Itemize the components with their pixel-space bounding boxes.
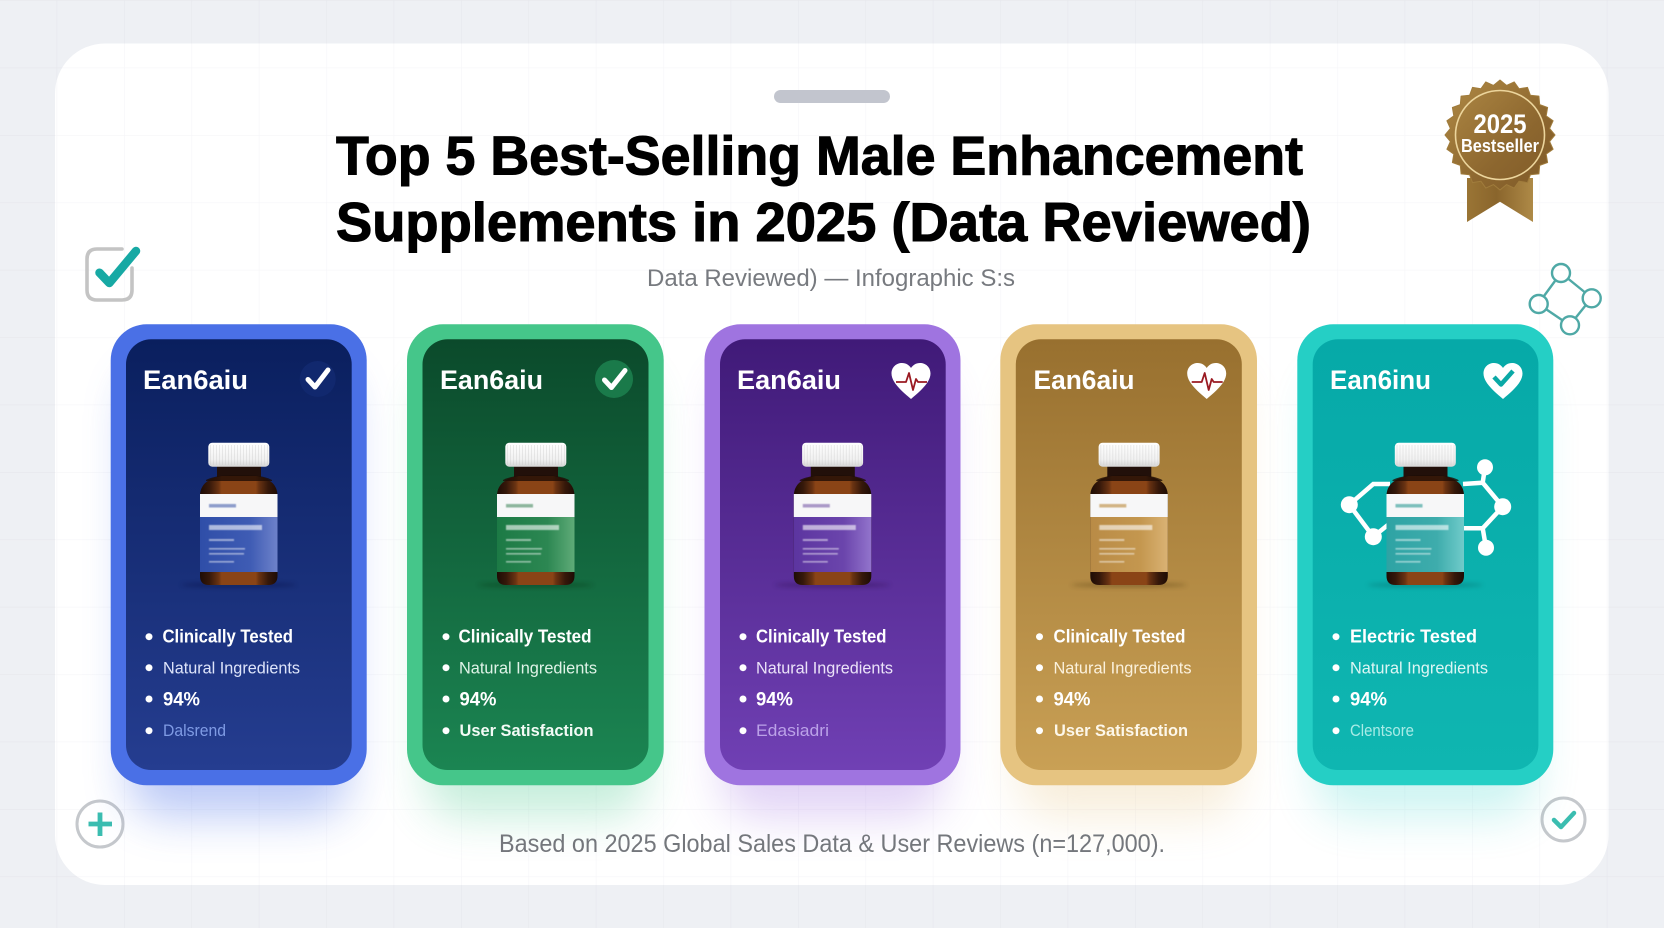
card 1 feature list: Natural Ingredients [163,658,300,677]
card 3 feature list: 94% [756,690,793,711]
icon: bestseller badge: Bestseller [1461,136,1539,156]
card 3 bottle [774,443,890,587]
card 5 bottle [1367,443,1483,587]
card 2 feature list [442,627,597,740]
icon: molecule outline [1530,264,1601,334]
card 1 feature list: Dalsrend [163,721,226,740]
card 4 feature list: Clinically Tested [1054,627,1186,647]
title [336,124,1311,253]
card 3 feature list: Clinically Tested [756,627,886,647]
card 4: gold [1000,324,1257,817]
card 4 bottle [1071,443,1187,587]
card 4 brand name: Ean6aiu [1034,365,1134,395]
card 5 feature list: Natural Ingredients [1350,658,1488,677]
footnote: Based on 2025 Global Sales Data & User Reviews (n=127,000). [499,830,1165,858]
card 4 feature list: User Satisfaction [1054,721,1188,740]
card 5 feature list: Clentsore [1350,721,1414,740]
card 3 brand name: Ean6aiu [737,365,841,395]
card 5 feature list: 94% [1350,690,1387,711]
card 1 feature list: Clinically Tested [162,627,293,647]
card 1 icon: check [300,361,336,397]
card 3: purple [704,324,960,817]
card 1: blue [111,324,367,817]
card 3 icon: heart with pulse [892,363,930,399]
card 2 feature list: Natural Ingredients [459,658,597,677]
card 2 feature list: User Satisfaction [460,721,594,740]
card 5 icon: heart with check [1484,363,1522,399]
card 2 icon: check [595,360,633,398]
card 2 feature list: 94% [460,690,497,711]
card 5 feature list [1332,627,1488,740]
card 2: green [407,324,664,817]
card 2 brand name: Ean6aiu [440,365,543,395]
icon: checkbox [87,249,136,300]
subtitle: Data Reviewed) — Infographic S:s [647,265,1015,292]
card 5 feature list: Electric Tested [1350,627,1477,647]
card 3 feature list: Natural Ingredients [756,658,893,677]
card 4 feature list: 94% [1054,690,1091,711]
card 1 brand name: Ean6aiu [143,365,248,395]
card 4 icon: heart with pulse [1187,363,1226,399]
card 3 feature list: Edasiadri [756,721,829,740]
top drag pill [774,90,890,103]
icon: check circle [1542,798,1585,841]
card 2 feature list: Clinically Tested [458,627,592,647]
card 1 feature list: 94% [163,690,200,711]
card 4 feature list: Natural Ingredients [1054,658,1192,677]
title: Supplements in 2025 (Data Reviewed) [336,191,1311,253]
icon: plus circle [77,801,123,847]
icon: bestseller badge [1445,80,1555,222]
card 4 feature list [1036,627,1192,740]
title: Top 5 Best-Selling Male Enhancement [336,124,1303,186]
card 2 bottle [478,443,594,587]
card 5 molecule diagram [1341,459,1511,556]
card 5 brand name: Ean6inu [1330,365,1431,395]
icon: bestseller badge: 2025 [1474,109,1526,139]
card 1 bottle [181,443,297,587]
card 1 feature list [146,627,300,740]
card 5: teal [1297,324,1553,817]
card 3 feature list [740,627,893,740]
